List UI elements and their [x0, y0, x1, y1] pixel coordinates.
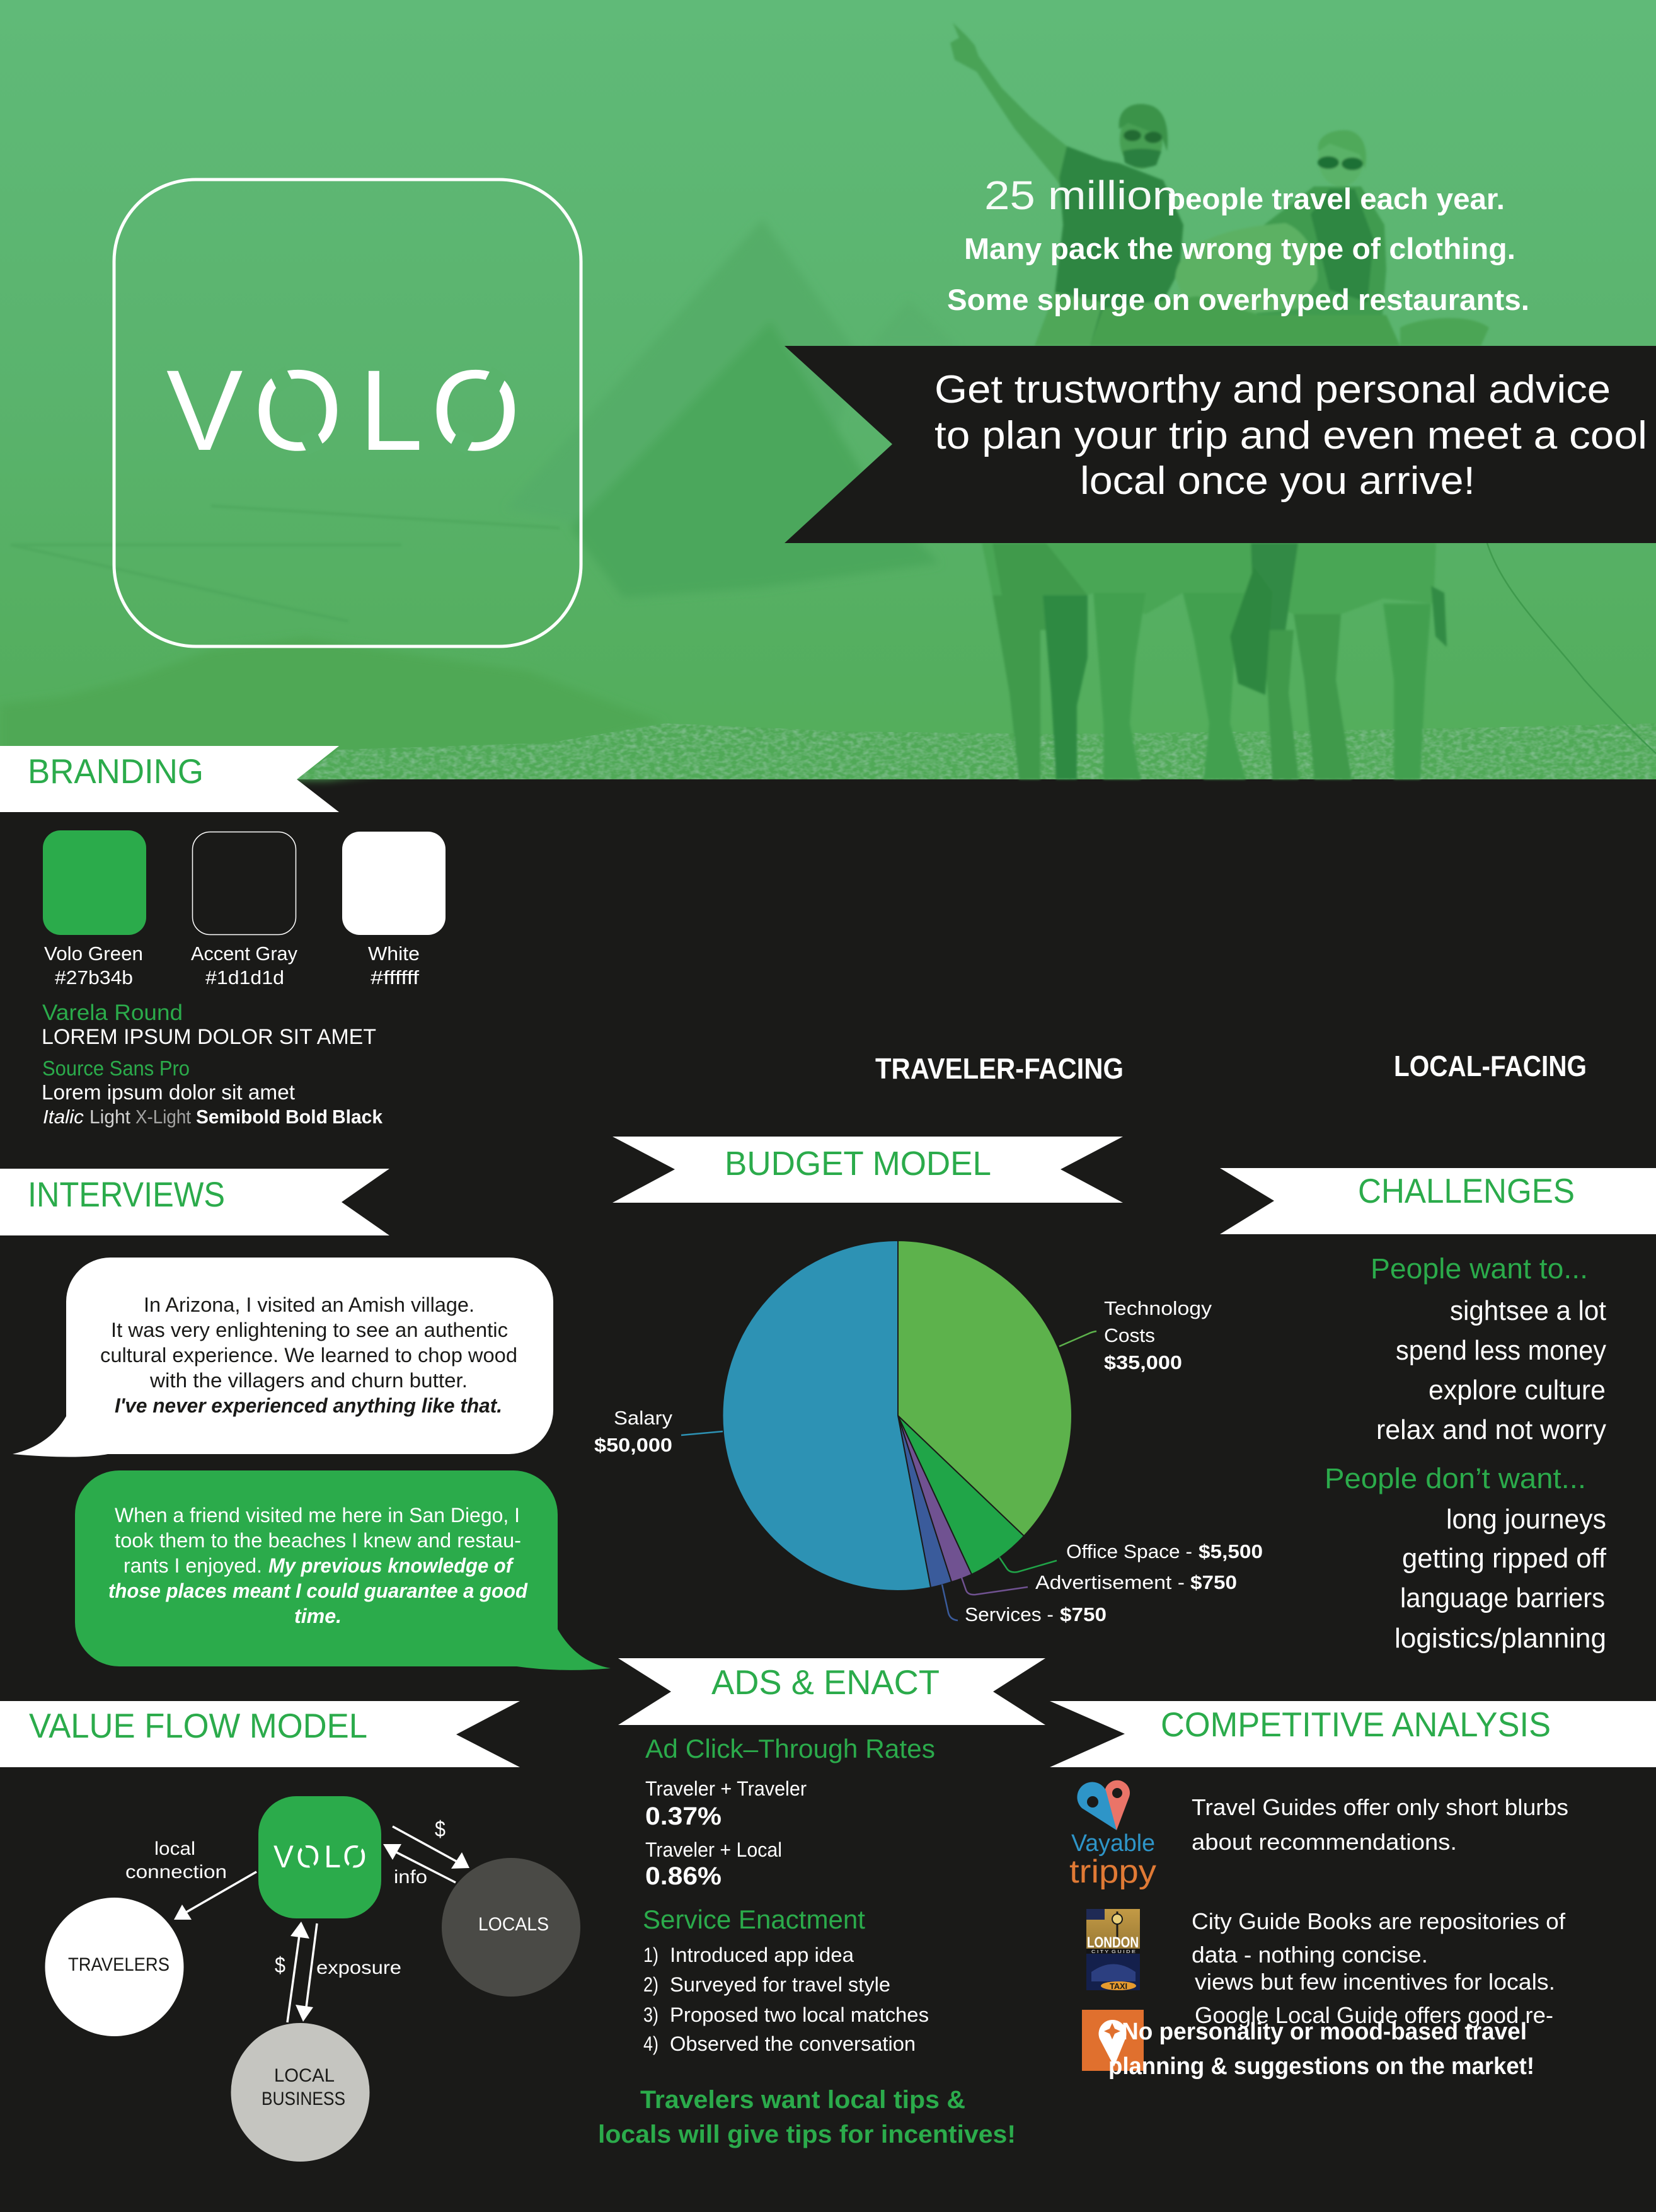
camel bodies below the ribbon — [982, 543, 1436, 614]
panel: typography samples: LOREM IPSUM DOLOR SIT AMET — [42, 1025, 376, 1049]
panel: service enactment: Observed the conversation — [670, 2032, 916, 2055]
pie label: technology: Technology — [1104, 1297, 1212, 1319]
panel: click-through rates: 0.86% — [645, 1862, 722, 1890]
flow label: local connection: connection — [125, 1862, 227, 1882]
panel: color swatches — [43, 830, 446, 989]
arrow: locals to volo — [383, 1844, 456, 1882]
speech bubble: local quote: took them to the beaches I knew and restau- — [115, 1529, 521, 1552]
panel: typography samples: Varela Round — [42, 1000, 183, 1025]
icon: london city guide book — [1086, 1909, 1140, 1991]
node: travelers — [45, 1898, 184, 2036]
panel: people want: sightsee a lot — [1450, 1295, 1606, 1326]
hero statistics text: Some splurge on overhyped restaurants. — [947, 283, 1529, 316]
pie label: technology: Costs — [1104, 1324, 1155, 1346]
heading: challenges: CHALLENGES — [1358, 1171, 1575, 1210]
swatch: accent gray — [191, 832, 297, 989]
swatch: volo green: #27b34b — [55, 966, 133, 989]
pie label: advertisement: $750 — [1190, 1571, 1237, 1593]
logo wordmark: VOLO — [166, 346, 520, 474]
heading: branding: BRANDING — [28, 752, 204, 791]
heading: competitive analysis — [1050, 1701, 1656, 1767]
speech bubble: local quote: time. — [294, 1605, 342, 1627]
flow label: local connection: local — [154, 1838, 195, 1859]
hero banner with value proposition: local once you arrive! — [1080, 459, 1475, 503]
arrow: volo to travelers — [174, 1872, 256, 1920]
panel: click-through rates: 0.37% — [645, 1802, 722, 1830]
icon: london city guide book: C I T Y G U I D E — [1091, 1950, 1136, 1954]
arrow: volo to local business — [296, 1923, 317, 2022]
panel: typography samples: Black — [332, 1106, 383, 1128]
panel: people don't want — [1325, 1462, 1607, 1654]
heading: value flow model — [0, 1701, 520, 1767]
panel: click-through rates: Traveler + Local — [645, 1838, 782, 1861]
flow label: local connection — [125, 1838, 227, 1882]
panel: people don't want: getting ripped off — [1402, 1543, 1607, 1574]
panel: people want: People want to... — [1371, 1252, 1588, 1285]
diagram: value flow — [45, 1796, 580, 2162]
icon: vayable and trippy logos — [1069, 1780, 1156, 1890]
speech bubble: traveler quote: It was very enlightening to see an authentic — [111, 1319, 508, 1341]
node: local business: BUSINESS — [262, 2089, 345, 2109]
arrow: volo to locals — [393, 1826, 469, 1869]
takeaway: travelers and locals: Travelers want local tips & — [640, 2086, 965, 2114]
heading: budget model: BUDGET MODEL — [725, 1145, 991, 1183]
swatch: volo green — [43, 830, 146, 989]
pie label: services: $750 — [1060, 1603, 1107, 1625]
callout: market gap — [1108, 2019, 1534, 2080]
panel: people want — [1371, 1252, 1606, 1445]
text: google local guide — [1195, 1969, 1555, 2028]
arrow: local business to volo — [287, 1922, 309, 2022]
panel: service enactment: 4) — [643, 2032, 658, 2055]
heading: challenges — [1220, 1168, 1656, 1234]
node: travelers: TRAVELERS — [68, 1954, 170, 1975]
icon: london city guide book: LONDON — [1087, 1934, 1139, 1951]
panel: typography samples: Lorem ipsum dolor sit amet — [42, 1080, 295, 1104]
panel: service enactment: Service Enactment — [643, 1905, 865, 1934]
panel: click-through rates: Ad Click–Through Rates — [645, 1734, 935, 1763]
swatch: white — [342, 832, 446, 989]
panel: people don't want: long journeys — [1446, 1504, 1606, 1535]
swatch: accent gray: Accent Gray — [191, 943, 297, 965]
node: locals — [442, 1858, 580, 1997]
hero banner with value proposition — [785, 346, 1656, 543]
speech bubble: local quote — [75, 1470, 611, 1670]
text: travel guides — [1192, 1794, 1568, 1855]
panel: typography samples: Semibold — [196, 1106, 280, 1128]
swatch: volo green: Volo Green — [44, 943, 143, 965]
panel: typography samples: Bold — [285, 1106, 328, 1128]
callout: market gap: planning & suggestions on the market! — [1108, 2053, 1534, 2080]
icon: london city guide book: TAXI — [1110, 1981, 1127, 1991]
hero photo: tinted pyramids and camel riders — [0, 0, 1656, 779]
speech bubble: traveler quote: with the villagers and churn butter. — [149, 1369, 468, 1392]
swatch: accent gray: #1d1d1d — [205, 966, 284, 989]
panel: service enactment: 2) — [643, 1973, 658, 1996]
speech bubble: traveler quote: I've never experienced anything like that. — [115, 1394, 502, 1417]
swatch: white: #ffffff — [371, 966, 419, 989]
pie label: salary: $50,000 — [594, 1434, 672, 1456]
panel: people want: spend less money — [1396, 1335, 1606, 1366]
pie chart: budget — [594, 1241, 1263, 1625]
node: locals: LOCALS — [478, 1914, 549, 1935]
panel: service enactment: Introduced app idea — [670, 1944, 854, 1966]
speech bubble: traveler quote — [13, 1258, 553, 1457]
node: volo — [258, 1796, 381, 1918]
label: local-facing: LOCAL-FACING — [1394, 1050, 1587, 1082]
takeaway: travelers and locals — [598, 2086, 1016, 2148]
speech bubble: local quote: My previous knowledge of — [268, 1554, 514, 1577]
panel: typography samples: Source Sans Pro — [42, 1057, 190, 1080]
heading: value flow model: VALUE FLOW MODEL — [29, 1706, 367, 1745]
hero statistics text: people travel each year. — [1167, 182, 1505, 215]
flow label: money to locals: $ — [435, 1817, 446, 1842]
flow label: exposure: exposure — [316, 1957, 401, 1978]
pie label: salary — [594, 1407, 673, 1456]
panel: people don't want: People don’t want... — [1325, 1462, 1586, 1494]
panel: service enactment — [643, 1905, 929, 2055]
node: local business: LOCAL — [274, 2065, 335, 2086]
hero statistics text: 25 million — [984, 173, 1178, 218]
pie label: technology: $35,000 — [1104, 1351, 1182, 1373]
hero statistics text: Many pack the wrong type of clothing. — [964, 232, 1515, 265]
swatch: white: White — [368, 943, 420, 965]
speech bubble: traveler quote: In Arizona, I visited an Amish village. — [144, 1293, 474, 1316]
panel: service enactment: 3) — [643, 2003, 658, 2026]
camel heads and saddles — [1175, 223, 1318, 315]
panel: typography samples — [42, 1000, 383, 1128]
pie label: office space: Office Space - — [1066, 1540, 1192, 1562]
speech bubble: local quote: When a friend visited me here in San Diego, I — [115, 1504, 520, 1527]
panel: people don't want: logistics/planning — [1394, 1623, 1606, 1654]
text: city guide books: City Guide Books are repositories of — [1192, 1908, 1566, 1934]
panel: service enactment: Proposed two local matches — [670, 2003, 929, 2026]
text: google local guide: views but few incentives for locals. — [1195, 1969, 1555, 1995]
panel: click-through rates — [645, 1734, 935, 1890]
pie label: advertisement: Advertisement - — [1035, 1571, 1185, 1593]
icon: google local guide pin — [1082, 2010, 1144, 2071]
riders — [950, 23, 1103, 202]
heading: budget model — [612, 1137, 1123, 1203]
icon: vayable and trippy logos: Vayable — [1071, 1830, 1155, 1857]
text: google local guide: Google Local Guide offers good re- — [1195, 2002, 1553, 2028]
label: traveler-facing: TRAVELER-FACING — [875, 1052, 1124, 1085]
pie label: office space: $5,500 — [1199, 1540, 1263, 1562]
text: city guide books — [1192, 1908, 1566, 1968]
speech bubble: local quote: rants I enjoyed. — [124, 1554, 262, 1577]
panel: people don't want: language barriers — [1400, 1583, 1605, 1613]
pie label: salary: Salary — [614, 1407, 673, 1429]
flow label: money from business: $ — [275, 1953, 285, 1978]
speech bubble: traveler quote: cultural experience. We learned to chop wood — [100, 1344, 517, 1367]
hero banner with value proposition: to plan your trip and even meet a cool — [934, 414, 1647, 457]
pie label: office space — [1066, 1540, 1263, 1562]
pie label: advertisement — [1035, 1571, 1237, 1593]
heading: branding — [0, 746, 339, 812]
node: local business — [231, 2023, 369, 2162]
heading: interviews: INTERVIEWS — [28, 1174, 225, 1214]
panel: people want: explore culture — [1429, 1375, 1606, 1406]
icon: vayable and trippy logos: trippy — [1069, 1854, 1156, 1890]
panel: service enactment: 1) — [643, 1944, 658, 1966]
flow label: info: info — [394, 1867, 427, 1888]
callout: market gap: No personality or mood-based travel — [1122, 2019, 1527, 2045]
panel: people want: relax and not worry — [1376, 1414, 1606, 1445]
panel: click-through rates: Traveler + Traveler — [645, 1777, 807, 1800]
pie label: technology — [1104, 1297, 1212, 1373]
takeaway: travelers and locals: locals will give tips for incentives! — [598, 2121, 1016, 2148]
pie label: services — [965, 1603, 1107, 1625]
panel: service enactment: Surveyed for travel style — [670, 1973, 890, 1996]
panel: typography samples: Italic — [43, 1106, 84, 1128]
heading: competitive analysis: COMPETITIVE ANALYSIS — [1161, 1705, 1551, 1744]
speech bubble: local quote: those places meant I could guarantee a good — [108, 1579, 528, 1602]
node: volo: VOLO — [273, 1840, 366, 1874]
panel: typography samples: Light — [89, 1106, 130, 1128]
text: city guide books: data - nothing concise. — [1192, 1942, 1428, 1968]
heading: ads and enact — [618, 1658, 1045, 1725]
heading: interviews — [0, 1169, 389, 1235]
panel: typography samples: X-Light — [135, 1106, 191, 1128]
pie leader lines — [681, 1331, 1096, 1620]
text: travel guides: Travel Guides offer only short blurbs — [1192, 1794, 1568, 1820]
pie label: services: Services - — [965, 1603, 1054, 1625]
hero banner with value proposition: Get trustworthy and personal advice — [934, 368, 1611, 411]
text: travel guides: about recommendations. — [1192, 1829, 1457, 1855]
hero statistics text — [947, 173, 1529, 316]
heading: ads and enact: ADS & ENACT — [711, 1663, 940, 1702]
logo frame: VOLO wordmark — [114, 180, 581, 646]
